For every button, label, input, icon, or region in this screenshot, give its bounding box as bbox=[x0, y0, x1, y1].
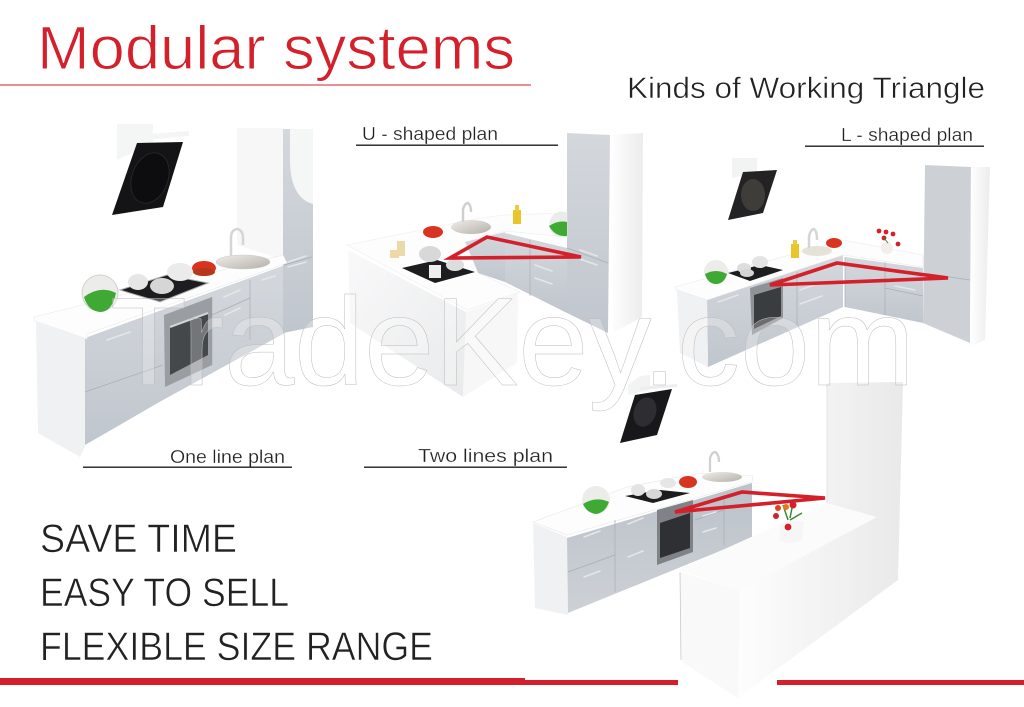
drawer lines bbox=[85, 276, 275, 392]
fruit bowl bbox=[704, 260, 728, 284]
heading: L - shaped plan bbox=[841, 125, 973, 145]
drawer lines bbox=[718, 257, 923, 325]
drawer lines bbox=[568, 495, 724, 592]
working triangle bbox=[770, 263, 948, 285]
cabinet side bbox=[533, 523, 568, 615]
title underline bbox=[0, 84, 531, 86]
cooktop and pots bbox=[402, 246, 475, 283]
working triangle bbox=[450, 237, 581, 258]
drawer handles bbox=[530, 240, 552, 296]
watermark: TradeKey.com bbox=[110, 273, 915, 412]
sink and faucet bbox=[216, 229, 270, 269]
left side panel bbox=[677, 290, 708, 367]
panel: L-shaped plan kitchen bbox=[675, 125, 990, 367]
title: Modular systems bbox=[37, 14, 515, 82]
oven bbox=[657, 500, 693, 565]
heading underline bbox=[805, 146, 984, 147]
sink and faucet bbox=[451, 203, 491, 234]
tall cabinet bbox=[567, 133, 643, 333]
bottle bbox=[791, 240, 799, 258]
tomato bowl bbox=[826, 238, 842, 248]
grey fronts bbox=[707, 255, 843, 367]
panel: U-shaped plan kitchen bbox=[347, 124, 643, 397]
sink and faucet bbox=[702, 452, 742, 482]
peninsula side bbox=[348, 250, 466, 397]
cooktop and pots bbox=[728, 256, 783, 281]
jars bbox=[390, 241, 405, 258]
benefits list: SAVE TIME bbox=[40, 517, 237, 561]
heading underline bbox=[356, 144, 558, 146]
benefits list: EASY TO SELL bbox=[40, 571, 289, 615]
tomato bowl bbox=[679, 476, 697, 488]
worktop bbox=[347, 213, 567, 310]
working triangle bbox=[675, 492, 825, 512]
subtitle: Kinds of Working Triangle bbox=[627, 72, 985, 105]
cooktop and pots bbox=[625, 478, 690, 503]
panel: two lines plan kitchen bbox=[533, 375, 903, 698]
heading: U - shaped plan bbox=[362, 124, 498, 144]
cabinet fronts bbox=[567, 483, 752, 613]
label: two lines plan: Two lines plan bbox=[418, 446, 553, 466]
sink and faucet bbox=[802, 229, 832, 256]
tall cabinet bbox=[237, 128, 313, 333]
worktop bbox=[34, 255, 287, 339]
hood bbox=[112, 124, 189, 215]
cabinet fronts bbox=[85, 265, 285, 445]
label: one line plan: One line plan bbox=[170, 447, 285, 467]
bottle bbox=[513, 205, 521, 224]
flowers bbox=[773, 502, 804, 543]
hood bbox=[728, 158, 777, 220]
flowers bbox=[877, 229, 900, 254]
tomato bowl bbox=[192, 261, 216, 276]
bottom red bar bbox=[0, 678, 1024, 685]
benefits list: FLEXIBLE SIZE RANGE bbox=[40, 625, 433, 669]
oven bbox=[750, 278, 783, 335]
oven bbox=[164, 297, 212, 387]
hood bbox=[620, 375, 677, 443]
tall cabinet bbox=[923, 165, 990, 347]
cabinet side bbox=[36, 322, 87, 457]
cooktop and pots bbox=[120, 263, 208, 302]
fruit bowl bbox=[549, 212, 567, 238]
grey fronts bbox=[465, 232, 505, 282]
fruit bowl bbox=[582, 486, 610, 514]
benefits list bbox=[40, 517, 433, 669]
panel: one line plan kitchen bbox=[34, 124, 313, 457]
island and tall unit bbox=[678, 382, 903, 698]
worktop bbox=[675, 240, 923, 300]
worktop bbox=[533, 473, 753, 535]
tomato bowl bbox=[423, 226, 443, 238]
fruit bowl bbox=[82, 275, 118, 312]
